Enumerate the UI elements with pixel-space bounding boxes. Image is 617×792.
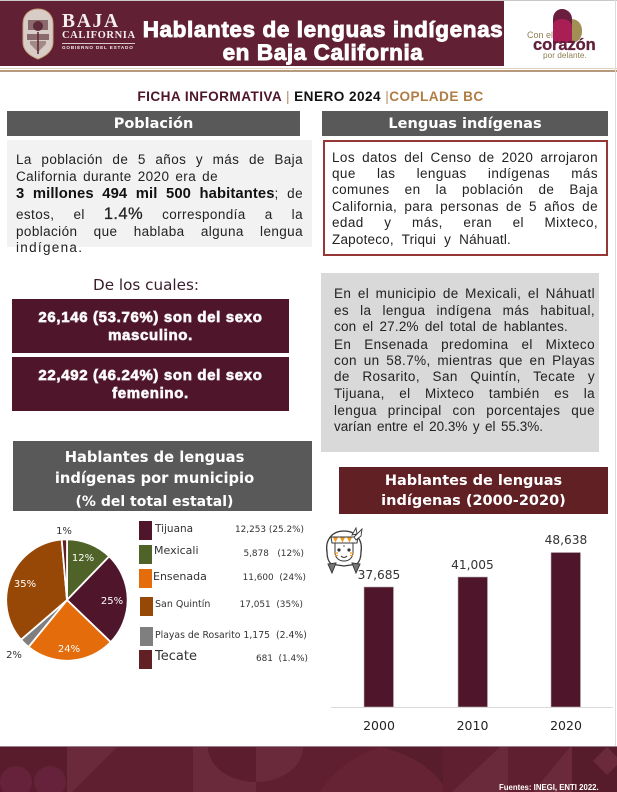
legend item: Mexicali [139, 544, 304, 564]
panel: lenguas text [323, 140, 608, 256]
logo: Con el corazón por delante: Con el [527, 30, 553, 40]
legend item: San Quintín [140, 597, 303, 616]
bar: 2010: 2010 [457, 718, 488, 733]
legend item: Playas de Rosarito: Playas de Rosarito 1,175 (2.4%) [155, 630, 307, 641]
text: Zapoteco, Triqui y Náhuatl. [332, 232, 511, 247]
bar: 2020 [545, 533, 587, 733]
footer band [0, 746, 617, 792]
title: en Baja California [223, 40, 423, 65]
bar: 2000: 2000 [363, 718, 395, 733]
text: Tijuana, el Mixteco también es la [334, 386, 595, 401]
subtitle: FICHA INFORMATIVA | ENERO 2024 |COPLADE BC [137, 89, 484, 104]
bar: 2010 [451, 558, 494, 733]
heading: hablantes por municipio: Hablantes de lenguas [65, 449, 244, 466]
panel: sexo masculino [12, 299, 289, 353]
panel: población text [7, 140, 312, 247]
Baja California logo text: GOBIERNO DEL ESTADO [62, 45, 134, 50]
legend item: San Quintín: San Quintín [155, 599, 210, 610]
text: indígena. [16, 240, 83, 255]
text: En el municipio de Mexicali, el Náhuatl [334, 286, 595, 301]
legend item: Tijuana [139, 521, 304, 540]
legend item: Tijuana: Tijuana [155, 523, 193, 535]
text: estos, el 1.4% correspondía a la [16, 205, 303, 223]
text: En Ensenada predomina el Mixteco [334, 337, 595, 352]
bar: 2020: 2020 [550, 718, 582, 733]
text: 3 millones 494 mil 500 habitantes; de [16, 186, 303, 202]
heading: hablantes 2000-2020 [339, 467, 608, 514]
heading: hablantes por municipio: indígenas por municipio [55, 470, 254, 487]
page edge line [615, 0, 616, 746]
header band [0, 0, 617, 72]
legend item: Ensenada [139, 569, 306, 588]
legend item: San Quintín: 17,051 (35%) [240, 600, 303, 610]
panel: sexo femenino [12, 357, 289, 411]
legend item: Ensenada: Ensenada [153, 570, 207, 583]
text: con un 58.7%, mientras que en Playas [334, 353, 595, 368]
legend item: Mexicali: 5,878 (12%) [243, 549, 304, 559]
pie chart: 2% [6, 650, 22, 661]
heading: Población: Población [114, 116, 193, 132]
bar chart [331, 533, 613, 733]
text: edad y más, eran el Mixteco, [332, 215, 598, 230]
legend [139, 521, 308, 669]
pie chart: 24% [58, 644, 80, 655]
title [143, 17, 503, 65]
pie chart: 35% [14, 579, 36, 590]
bar: 2010: 41,005 [451, 558, 494, 572]
heading: De los cuales: De los cuales: [93, 276, 199, 294]
pie chart: 12% [72, 553, 94, 564]
heading: hablantes por municipio: (% del total estatal) [76, 494, 233, 510]
logo: Con el corazón por delante: por delante. [543, 50, 587, 60]
text: de Rosarito, San Quintín, Tecate y [334, 369, 595, 384]
text: que las lenguas indígenas más [332, 166, 598, 181]
heading: hablantes 2000-2020: Hablantes de lenguas [385, 473, 562, 489]
logo: Con el corazón por delante: corazón [533, 36, 596, 54]
title: Hablantes de lenguas indígenas [143, 17, 503, 42]
heading: Lenguas indígenas: Lenguas indígenas [388, 116, 542, 132]
text: población que hablaba alguna lengua [16, 224, 303, 239]
pie chart: 25% [101, 596, 123, 607]
legend item: Playas de Rosarito [140, 627, 307, 646]
text: comunes en la población de Baja [332, 182, 598, 197]
legend item: Tecate: 681 (1.4%) [256, 654, 308, 664]
text: Los datos del Censo de 2020 arrojaron [332, 150, 598, 165]
heading: hablantes por municipio [13, 441, 312, 511]
legend item: Tijuana: 12,253 (25.2%) [235, 525, 304, 535]
panel: sexo femenino: 22,492 (46.24%) son del sexo femenino. [38, 367, 263, 402]
legend item: Ensenada: 11,600 (24%) [243, 573, 306, 583]
pie chart [6, 526, 127, 661]
text: lengua principal con porcentajes que [334, 403, 595, 418]
heading: Población [7, 111, 300, 136]
heading: Lenguas indígenas [322, 111, 608, 136]
panel: sexo masculino: 26,146 (53.76%) son del sexo masculino. [38, 309, 263, 344]
Baja California logo text: CALIFORNIA [62, 30, 136, 41]
legend item: Tecate [139, 649, 308, 669]
panel: municipios text [321, 273, 599, 452]
source note: Fuentes: INEGI, ENTI 2022. [499, 783, 599, 792]
logo: Con el corazón por delante [527, 9, 596, 60]
Baja California logo text: BAJA [62, 11, 120, 32]
text: con el 27.2% del total de hablantes. [334, 319, 568, 334]
text: California durante 2020 era de [16, 169, 218, 184]
text: California, para personas de 5 años de [332, 199, 598, 214]
bar: 2000 [358, 568, 400, 733]
text: es la lengua indígena más habitual, [334, 303, 595, 318]
bar: 2020: 48,638 [545, 533, 587, 547]
icon: state coat of arms [22, 8, 54, 60]
Baja California logo text [62, 11, 136, 50]
legend item: Mexicali: Mexicali [154, 544, 199, 557]
text: varían entre el 20.3% y el 55.3%. [334, 419, 543, 434]
icon: indigenous person [326, 526, 363, 574]
text: La población de 5 años y más de Baja [16, 152, 303, 167]
bar: 2000: 37,685 [358, 568, 400, 582]
heading: hablantes 2000-2020: indígenas (2000-2020) [381, 493, 566, 509]
pie chart: 1% [56, 526, 72, 537]
legend item: Tecate: Tecate [155, 649, 197, 664]
